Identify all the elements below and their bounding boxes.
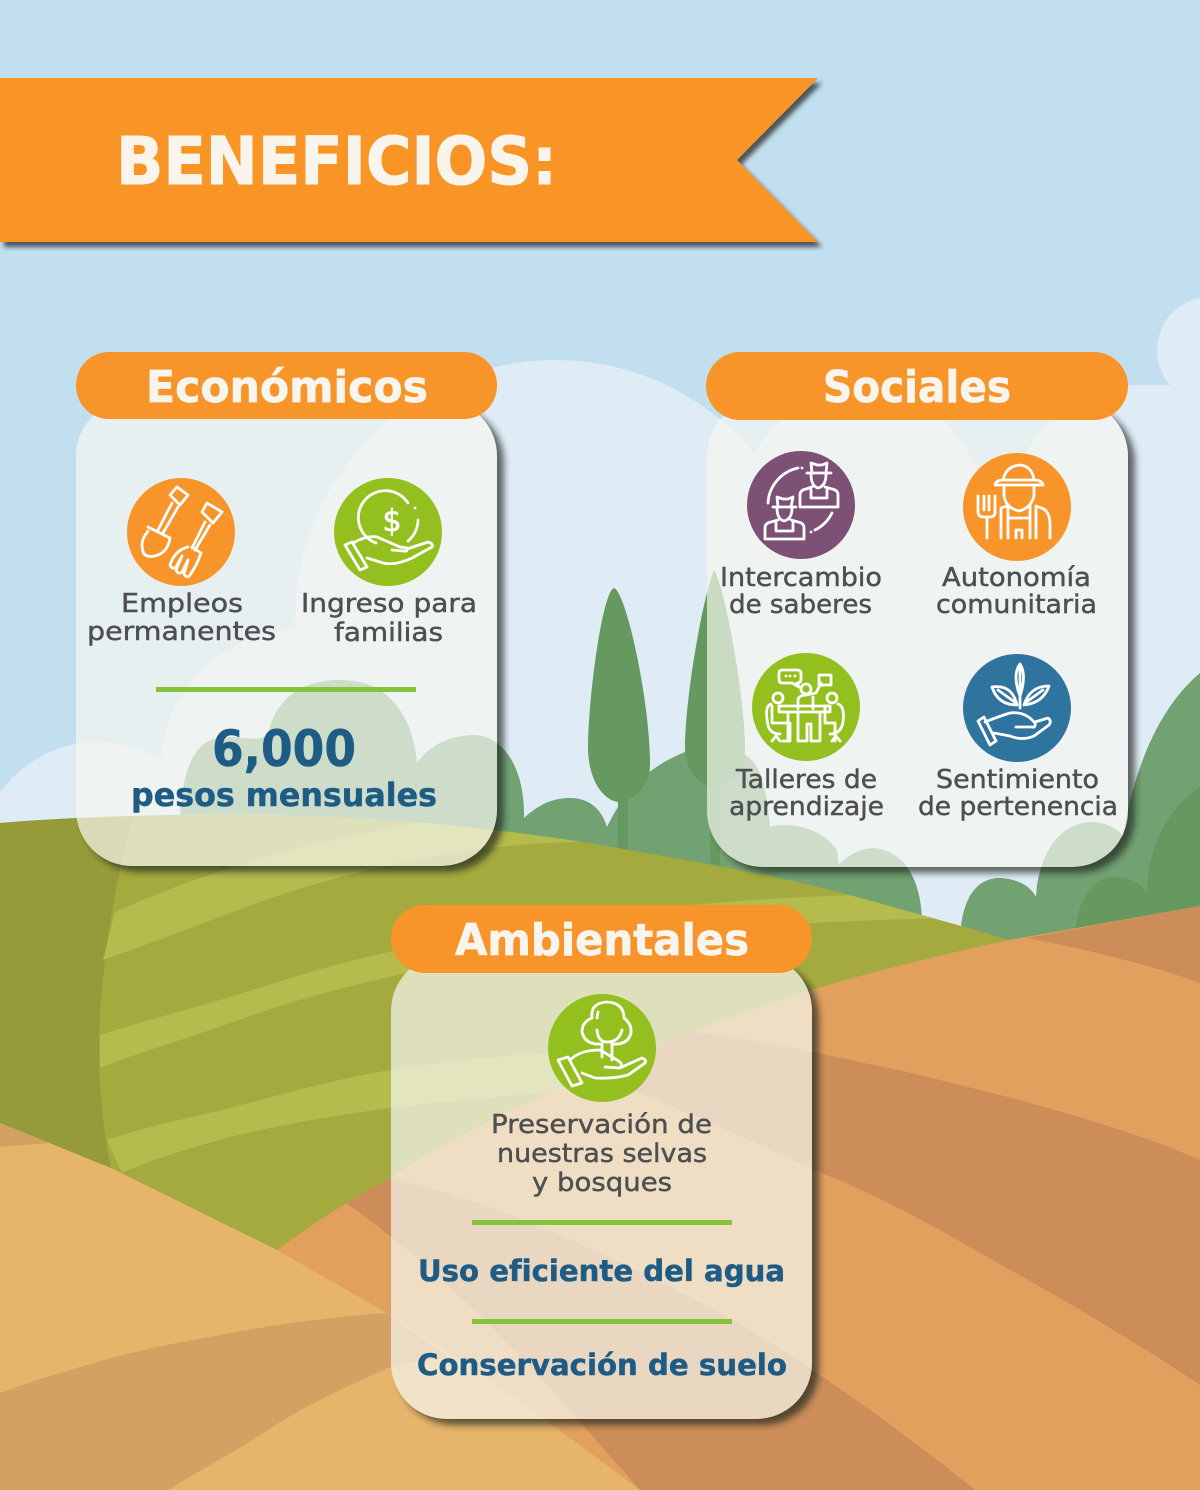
dark field edge bbox=[0, 817, 133, 1168]
label: Ingreso para familias: Ingreso para bbox=[301, 589, 477, 619]
landscape background bbox=[0, 298, 1200, 1490]
icon: shovel and fork bbox=[127, 478, 235, 586]
orange hill bands bbox=[346, 906, 1200, 1490]
field stripes bbox=[100, 822, 951, 1173]
label: Autonomía comunitaria bbox=[936, 563, 1097, 620]
panel: Sociales bbox=[706, 352, 1128, 867]
label: Talleres de aprendizaje: Talleres de bbox=[735, 765, 877, 795]
heading pill bbox=[391, 905, 812, 973]
label: Ingreso para familias bbox=[301, 589, 477, 648]
icon: money in hand: $ bbox=[382, 504, 402, 539]
banner bbox=[0, 78, 818, 242]
label: Empleos permanentes: Empleos bbox=[121, 589, 243, 619]
icon: money in hand bbox=[334, 478, 442, 586]
panel: Ambientales bbox=[391, 905, 812, 1419]
icon: sprout in hand bbox=[963, 654, 1071, 762]
figure: 6,000 pesos mensuales: pesos mensuales bbox=[131, 776, 437, 814]
label: Talleres de aprendizaje bbox=[729, 765, 884, 822]
icon: workshop table bbox=[752, 653, 860, 761]
figure: 6,000 pesos mensuales bbox=[131, 720, 437, 814]
label: Sentimiento de pertenencia: de pertenencia bbox=[918, 792, 1118, 822]
panel shadow bbox=[707, 400, 1128, 867]
light bushes bbox=[180, 673, 1200, 960]
cypress trees bbox=[588, 570, 1200, 960]
panel body bbox=[707, 400, 1128, 867]
ribbon bbox=[0, 78, 818, 242]
icon: tree in hand bbox=[548, 994, 656, 1102]
sand hill shading bbox=[0, 1313, 450, 1490]
sand hill bbox=[0, 1123, 640, 1490]
text: Preservación de nuestras selvas y bosques bbox=[491, 1110, 712, 1198]
panel body bbox=[391, 955, 812, 1419]
text: Preservación de nuestras selvas y bosques: Preservación de bbox=[491, 1110, 712, 1140]
green fields bbox=[0, 814, 1200, 1300]
label: Empleos permanentes: permanentes bbox=[87, 617, 276, 647]
text: Conservación de suelo: Conservación de suelo bbox=[417, 1348, 787, 1382]
label: Intercambio de saberes: de saberes bbox=[729, 590, 872, 620]
clouds bbox=[0, 297, 1200, 982]
heading pill bbox=[706, 352, 1128, 420]
icon: farmer with fork bbox=[963, 453, 1071, 561]
label: Intercambio de saberes: Intercambio bbox=[720, 563, 882, 593]
label: Intercambio de saberes bbox=[720, 563, 882, 620]
heading: Ambientales bbox=[455, 915, 749, 966]
title: BENEFICIOS: bbox=[116, 123, 557, 200]
label: Autonomía comunitaria: Autonomía bbox=[942, 563, 1091, 593]
heading pill bbox=[76, 352, 497, 419]
panel body bbox=[76, 400, 497, 866]
panel shadow bbox=[76, 400, 497, 866]
panel shadow bbox=[391, 955, 812, 1419]
text: Preservación de nuestras selvas y bosques: y bosques bbox=[532, 1168, 672, 1198]
icon: exchange between farmers bbox=[747, 451, 855, 559]
label: Sentimiento de pertenencia: Sentimiento bbox=[936, 765, 1099, 795]
label: Autonomía comunitaria: comunitaria bbox=[936, 590, 1097, 620]
heading: Económicos bbox=[146, 362, 428, 413]
label: Ingreso para familias: familias bbox=[334, 618, 443, 648]
label: Talleres de aprendizaje: aprendizaje bbox=[729, 792, 884, 822]
label: Sentimiento de pertenencia bbox=[918, 765, 1118, 822]
figure: 6,000 pesos mensuales: 6,000 bbox=[212, 720, 356, 778]
panel: Económicos bbox=[76, 352, 497, 866]
text: Preservación de nuestras selvas y bosques: nuestras selvas bbox=[497, 1139, 707, 1169]
label: Empleos permanentes bbox=[87, 589, 276, 647]
text: Uso eficiente del agua: Uso eficiente del agua bbox=[418, 1254, 785, 1288]
heading: Sociales bbox=[823, 362, 1011, 413]
orange hill bbox=[277, 906, 1200, 1490]
